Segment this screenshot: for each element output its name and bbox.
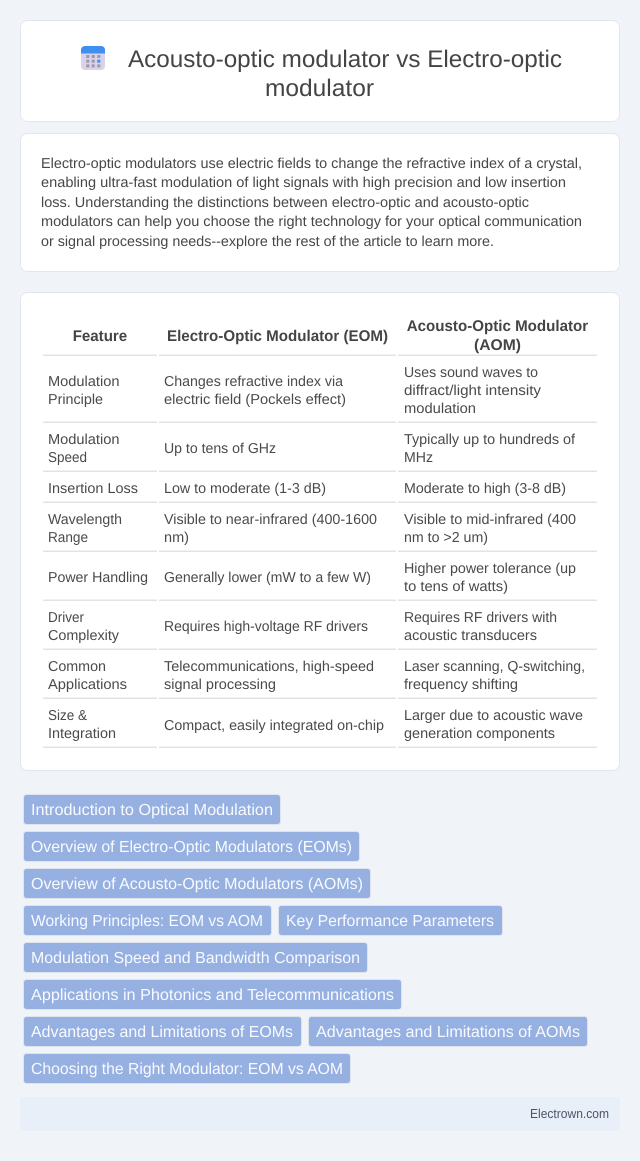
tag: overview of EOMs [24,832,360,862]
row: modulation principle: modulation [404,401,476,417]
row: modulation principle: Changes refractive index via [164,374,343,390]
title: Acousto-optic modulator vs Electro-optic [128,46,562,73]
tag: advantages of EOMs [24,1016,302,1046]
row: size and integration [43,708,597,748]
row: driver complexity [43,610,597,650]
row: size and integration: Compact, easily integrated on-chip [164,718,384,734]
row: power handling: to tens of watts) [404,579,508,595]
row: common applications: Applications [48,677,127,693]
tag: working principles: Working Principles: EOM vs AOM [31,913,263,930]
row: size and integration: Integration [48,726,116,742]
table header row: Feature [73,328,128,345]
row: insertion loss: Moderate to high (3-8 dB) [404,481,566,497]
tag: introduction [24,794,280,824]
row: modulation speed [43,432,597,472]
row: common applications: Laser scanning, Q-switching, [404,659,585,675]
row: modulation principle: Modulation [48,374,120,390]
row: size and integration: Larger due to acoustic wave [404,708,583,724]
tag: choosing the modulator [24,1054,350,1084]
row: power handling [43,561,597,601]
row: modulation speed: Typically up to hundreds of [404,432,576,448]
table header row: Electro-Optic Modulator (EOM) [167,328,388,345]
row: common applications: signal processing [164,677,276,693]
row: modulation speed: Modulation [48,432,120,448]
row: driver complexity: Requires RF drivers with [404,610,557,626]
row: size and integration: generation components [404,726,555,742]
row: driver complexity: Driver [48,610,84,626]
row: power handling: Higher power tolerance (up [404,561,576,577]
table header row: (AOM) [474,337,521,354]
panel: introduction text: or signal processing needs--explore the rest of the article to learn more. [41,234,494,250]
tag: overview of AOMs [24,868,370,898]
row: insertion loss: Low to moderate (1-3 dB) [164,481,326,497]
row: wavelength range: Range [48,530,88,546]
table header row [43,318,597,356]
row: modulation principle: diffract/light intensity [404,383,542,399]
row: modulation principle [43,365,597,423]
row: driver complexity: Complexity [48,628,120,644]
tag: speed and bandwidth [24,942,368,972]
row: modulation principle: electric field (Pockels effect) [164,392,346,408]
row: power handling: Power Handling [48,570,148,586]
row: insertion loss: Insertion Loss [48,481,138,497]
tag: applications [24,980,402,1010]
row: wavelength range: nm) [164,530,189,546]
tag: key performance parameters [278,906,502,936]
tag: working principles [24,906,272,936]
row: wavelength range: Visible to near-infrared (400-1600 [164,512,377,528]
tag: overview of EOMs: Overview of Electro-Optic Modulators (EOMs) [31,839,352,856]
tag: advantages of AOMs [308,1016,588,1046]
tag: key performance parameters: Key Performance Parameters [286,913,494,930]
row: driver complexity: Requires high-voltage RF drivers [164,619,368,635]
title [128,46,562,102]
row: driver complexity: acoustic transducers [404,628,537,644]
tag: introduction: Introduction to Optical Modulation [31,802,273,819]
panel: introduction text: modulators can help you choose the right technology for your optical communication [41,214,582,230]
panel: introduction text: enabling ultra-fast modulation of light signals with high precision and low insertion [41,175,566,191]
row: wavelength range: Visible to mid-infrared (400 [404,512,576,528]
row: insertion loss [43,481,597,503]
row: common applications: Telecommunications, high-speed [164,659,374,675]
tag: choosing the modulator: Choosing the Right Modulator: EOM vs AOM [31,1061,343,1078]
row: modulation speed: Up to tens of GHz [164,441,276,457]
panel: header [20,20,620,122]
icon: calendar grid [81,46,105,70]
panel: comparison table [20,292,620,770]
row: common applications: frequency shifting [404,677,518,693]
row: modulation speed: Speed [48,450,87,466]
row: wavelength range: Wavelength [48,512,122,528]
tag: overview of AOMs: Overview of Acousto-Optic Modulators (AOMs) [31,876,363,893]
row: common applications [43,659,597,699]
row: modulation speed: MHz [404,450,433,466]
footer [20,1097,620,1131]
row: wavelength range [43,512,597,552]
row: common applications: Common [48,659,106,675]
row: power handling: Generally lower (mW to a few W) [164,570,371,586]
panel: introduction text: loss. Understanding the distinctions between electro-optic and acousto-optic [41,195,529,211]
panel: introduction text [20,134,620,272]
row: wavelength range: nm to >2 um) [404,530,488,546]
row: modulation principle: Uses sound waves to [404,365,538,381]
title: modulator [265,75,374,102]
tag: speed and bandwidth: Modulation Speed and Bandwidth Comparison [31,950,360,967]
row: modulation principle: Principle [48,392,103,408]
panel: introduction text: Electro-optic modulators use electric fields to change the refractive index of a crystal, [41,156,582,172]
table header row: Acousto-Optic Modulator [407,318,588,335]
tag: advantages of AOMs: Advantages and Limitations of AOMs [316,1024,580,1041]
panel: topic tags [24,794,588,1084]
footer: Electrown.com [530,1106,609,1121]
tag: applications: Applications in Photonics and Telecommunications [31,987,394,1004]
tag: advantages of EOMs: Advantages and Limitations of EOMs [31,1024,293,1041]
row: size and integration: Size & [48,708,87,724]
